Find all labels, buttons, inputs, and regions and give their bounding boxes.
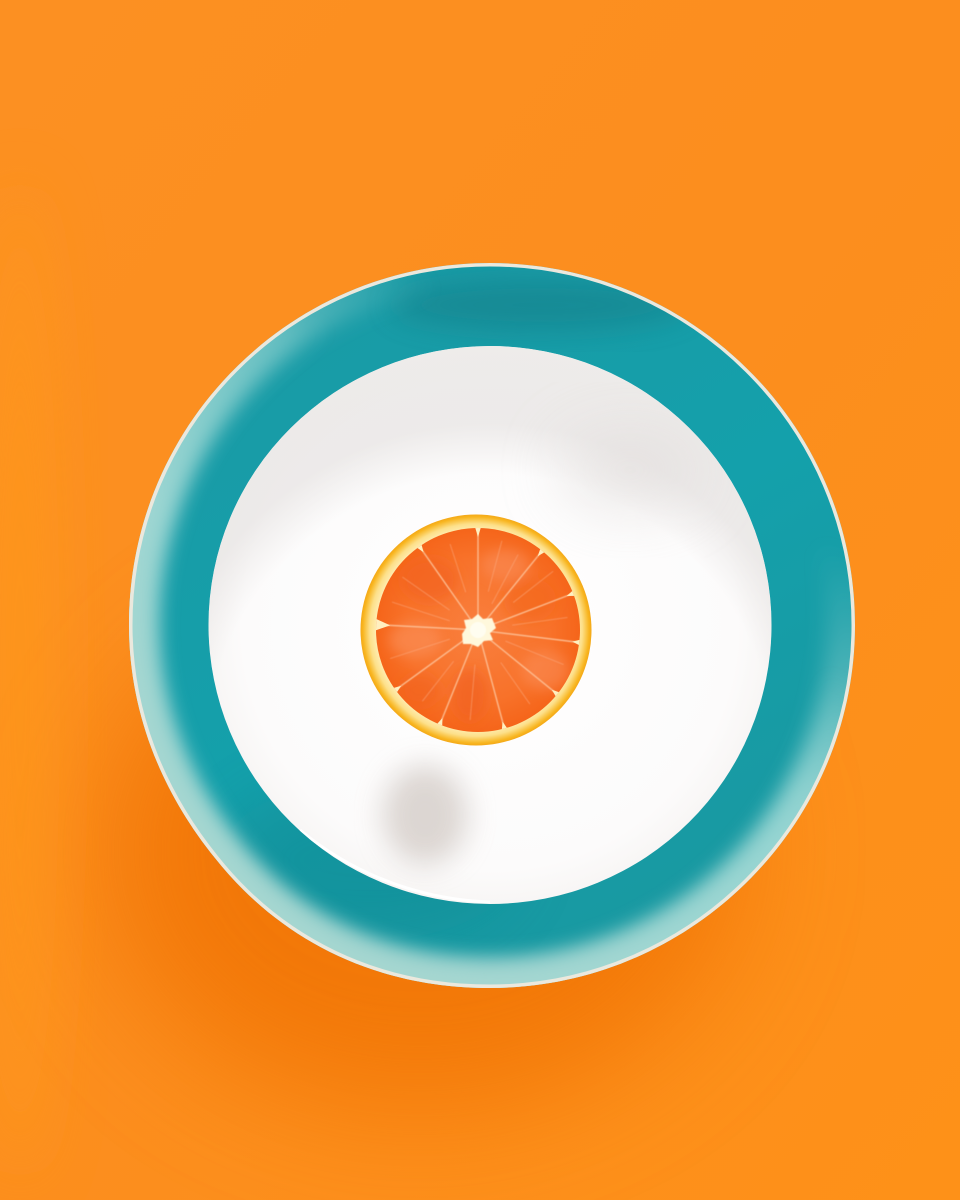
glaze fade: bottom bbox=[129, 263, 855, 988]
photo scene: citrus slice on stacked plates bbox=[84, 263, 855, 1127]
pith notches between segments bbox=[375, 527, 581, 730]
flesh bbox=[376, 528, 580, 732]
darker band beside bowl lower left bbox=[260, 821, 437, 914]
flesh fibers bbox=[391, 541, 567, 720]
white inner bowl bbox=[208, 346, 772, 904]
glaze fade: left bbox=[129, 340, 854, 988]
teal outer plate bbox=[129, 263, 855, 988]
white core bbox=[462, 614, 496, 647]
segment membranes bbox=[376, 528, 579, 729]
orange slice bbox=[360, 514, 592, 746]
bowl shading: rim glow bbox=[300, 830, 490, 902]
bowl shading: upper right bbox=[567, 454, 662, 517]
plate rim bbox=[129, 263, 855, 988]
bowl shading: soft shadow under the fruit bbox=[383, 765, 467, 865]
peel and pith bbox=[360, 514, 592, 746]
flesh tone patches bbox=[389, 549, 569, 721]
darker shadow at top bbox=[390, 279, 690, 331]
bowl shading: top wall bbox=[208, 346, 772, 636]
